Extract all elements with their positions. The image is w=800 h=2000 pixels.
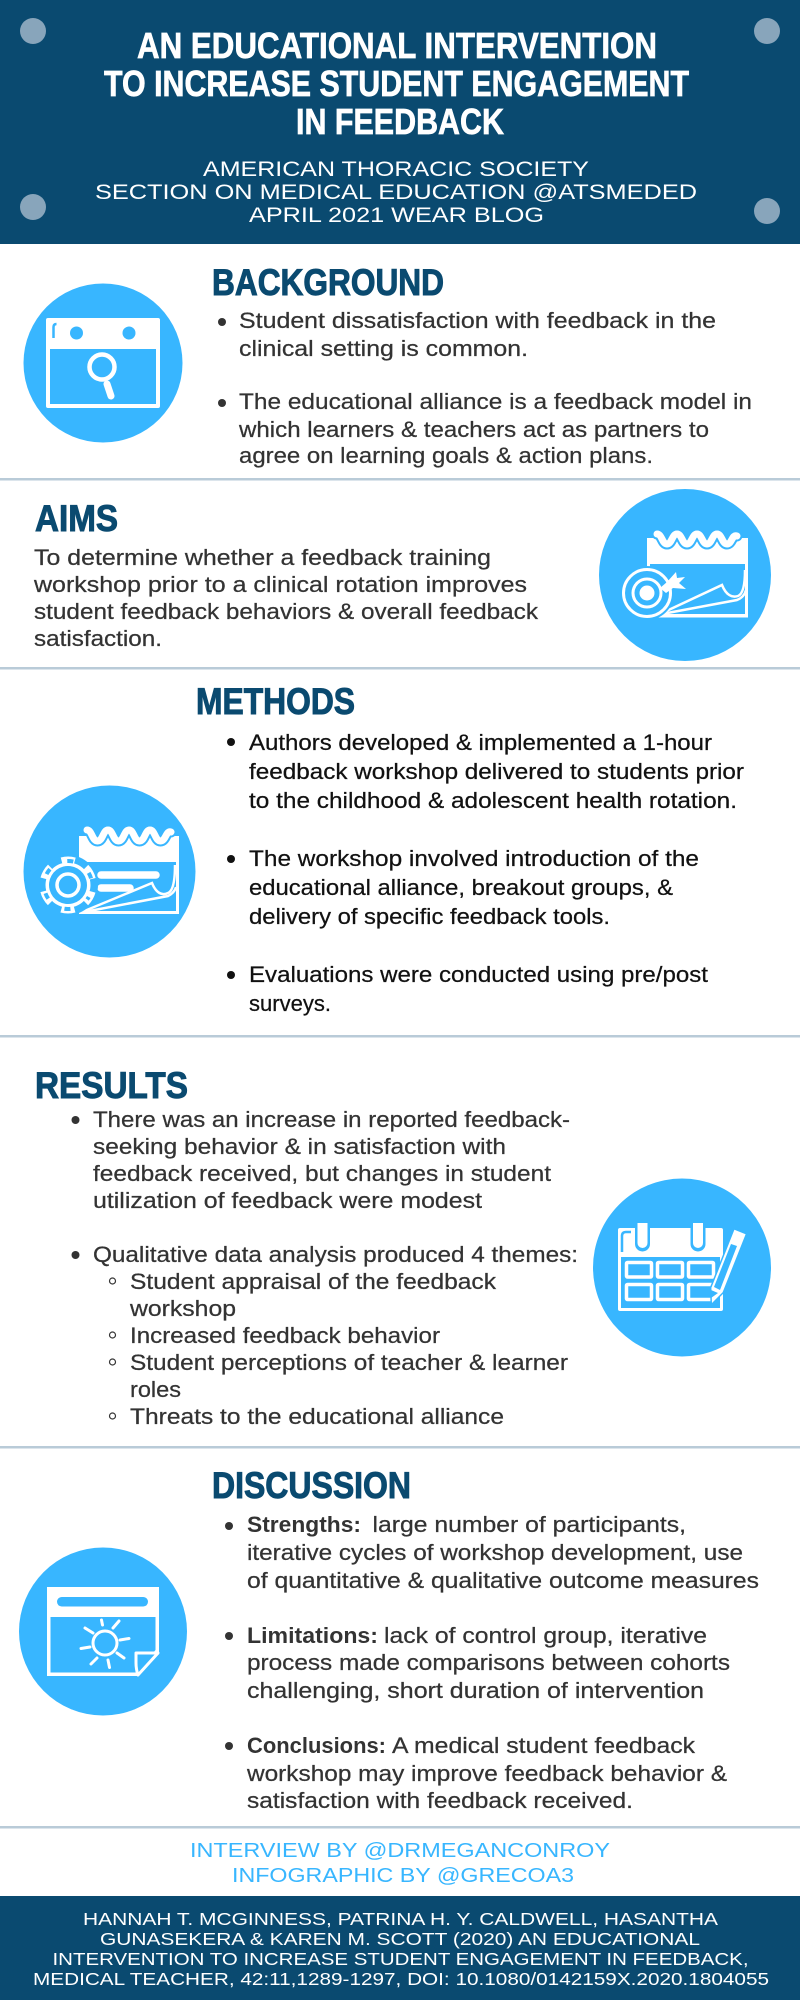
bullet: limitations: challenging, short duration of intervention	[247, 1678, 704, 1703]
bullet: dissatisfaction: clinical setting is common.	[239, 336, 528, 361]
header corner dots	[20, 18, 780, 224]
subtitle: APRIL 2021 WEAR BLOG	[249, 203, 544, 227]
panel: aims	[33, 489, 771, 661]
bullet: evaluations	[227, 962, 708, 1016]
theme list: roles	[130, 1377, 181, 1402]
footer citation panel: HANNAH T. MCGINNESS, PATRINA H. Y. CALDWELL, HASANTHA	[83, 1909, 719, 1929]
credits: INTERVIEW BY @DRMEGANCONROY	[190, 1839, 610, 1862]
aims text	[33, 545, 539, 651]
bullet: workshop developed: Authors developed & implemented a 1-hour	[249, 730, 712, 755]
bullet: dissatisfaction: Student dissatisfaction with feedback in the	[239, 308, 716, 333]
icon: calendar with pencil	[593, 1178, 771, 1356]
bullet: workshop content	[227, 846, 699, 929]
icon: calendar with magnifier	[24, 284, 182, 442]
bullet: workshop developed: feedback workshop delivered to students prior	[249, 759, 744, 784]
bullet: increase in behavior: There was an increase in reported feedback-	[93, 1107, 570, 1132]
heading: methods: METHODS	[196, 680, 355, 722]
theme list: Increased feedback behavior	[130, 1323, 440, 1348]
panel: results	[35, 1064, 771, 1429]
bullet: conclusions: Conclusions:	[247, 1733, 386, 1758]
bullet: educational alliance: agree on learning goals & action plans.	[239, 443, 653, 468]
heading: background: BACKGROUND	[212, 261, 444, 303]
footer citation panel: GUNASEKERA & KAREN M. SCOTT (2020) AN EDUCATIONAL	[100, 1929, 700, 1949]
panel: methods	[24, 680, 744, 1016]
aims text: satisfaction.	[34, 626, 162, 651]
subtitle: AMERICAN THORACIC SOCIETY	[203, 157, 589, 181]
aims text: To determine whether a feedback training	[34, 545, 491, 570]
bullet: limitations: Limitations:	[247, 1623, 378, 1648]
bullet: strengths: iterative cycles of workshop development, use	[247, 1540, 743, 1565]
title	[104, 25, 689, 142]
title: TO INCREASE STUDENT ENGAGEMENT	[104, 63, 689, 104]
icon: calendar with gear	[24, 786, 196, 958]
bullet: strengths	[225, 1512, 759, 1593]
aims text: student feedback behaviors & overall feedback	[34, 599, 539, 624]
heading: results: RESULTS	[35, 1064, 188, 1106]
header panel	[0, 0, 800, 244]
bullet: conclusions: satisfaction with feedback received.	[247, 1788, 633, 1813]
theme list: Student perceptions of teacher & learner	[130, 1350, 568, 1375]
bullet: educational alliance: which learners & teachers act as partners to	[238, 417, 709, 442]
bullet: dissatisfaction	[218, 308, 716, 361]
bullet: limitations: process made comparisons between cohorts	[247, 1650, 730, 1675]
bullet: conclusions: A medical student feedback	[392, 1733, 696, 1758]
bullet: increase in behavior: utilization of feedback were modest	[93, 1188, 482, 1213]
theme list: Threats to the educational alliance	[130, 1404, 504, 1429]
bullet: conclusions	[225, 1733, 727, 1813]
bullet: educational alliance: The educational alliance is a feedback model in	[239, 389, 752, 414]
bullet: workshop developed: to the childhood & adolescent health rotation.	[249, 788, 737, 813]
icon: calendar with target	[599, 489, 771, 661]
bullet: limitations	[225, 1623, 730, 1703]
bullet: workshop developed	[227, 730, 744, 813]
bullet: increase in behavior	[72, 1107, 570, 1213]
bullet: strengths: of quantitative & qualitative outcome measures	[247, 1568, 759, 1593]
bullet: workshop content: educational alliance, breakout groups, &	[249, 875, 673, 900]
title: IN FEEDBACK	[296, 101, 504, 142]
bullet: evaluations: Evaluations were conducted using pre/post	[249, 962, 708, 987]
subtitle: SECTION ON MEDICAL EDUCATION @ATSMEDED	[95, 180, 697, 204]
theme list: workshop	[129, 1296, 236, 1321]
bullet: evaluations: surveys.	[249, 991, 331, 1016]
bullet: increase in behavior: seeking behavior & in satisfaction with	[93, 1134, 506, 1159]
bullet: strengths: large number of participants,	[372, 1512, 686, 1537]
bullet: limitations: lack of control group, iterative	[384, 1623, 707, 1648]
theme list	[110, 1269, 568, 1429]
panel: discussion	[19, 1464, 759, 1813]
theme list: Student appraisal of the feedback	[130, 1269, 497, 1294]
bullet: qualitative themes	[72, 1242, 578, 1429]
title: AN EDUCATIONAL INTERVENTION	[137, 25, 657, 66]
footer citation panel: INTERVENTION TO INCREASE STUDENT ENGAGEMENT IN FEEDBACK,	[52, 1949, 748, 1969]
credits	[190, 1839, 610, 1887]
icon: calendar with sun	[19, 1548, 187, 1716]
bullet: workshop content: The workshop involved introduction of the	[249, 846, 699, 871]
bullet: workshop content: delivery of specific feedback tools.	[249, 904, 610, 929]
bullet: conclusions: workshop may improve feedback behavior &	[246, 1761, 727, 1786]
bullet: strengths: Strengths:	[247, 1512, 361, 1537]
bullet: educational alliance	[218, 389, 752, 468]
subtitle	[95, 157, 697, 227]
panel: background	[24, 261, 752, 468]
heading: aims: AIMS	[35, 497, 118, 539]
aims text: workshop prior to a clinical rotation improves	[33, 572, 527, 597]
footer citation panel	[0, 1896, 800, 2000]
heading: discussion: DISCUSSION	[212, 1464, 411, 1506]
credits: INFOGRAPHIC BY @GRECOA3	[232, 1864, 574, 1887]
bullet: increase in behavior: feedback received, but changes in student	[93, 1161, 551, 1186]
footer citation panel: MEDICAL TEACHER, 42:11,1289-1297, DOI: 10.1080/0142159X.2020.1804055	[33, 1969, 769, 1989]
bullet: qualitative themes: Qualitative data analysis produced 4 themes:	[93, 1242, 578, 1267]
